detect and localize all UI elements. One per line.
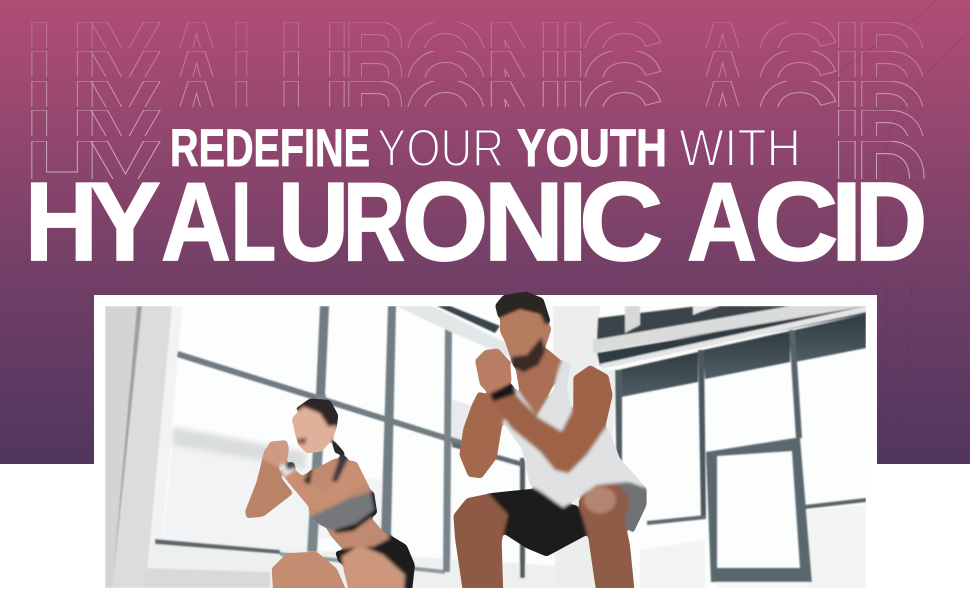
watch: [490, 383, 517, 402]
main title: R: [343, 160, 405, 284]
beard: [512, 337, 545, 372]
shorts: [336, 534, 415, 588]
woman: [245, 398, 415, 595]
main title: N: [484, 160, 564, 284]
dark window beams: [618, 352, 698, 397]
main title: [24, 160, 927, 284]
main title: C: [579, 160, 664, 284]
main title: C: [754, 160, 839, 284]
main title: H: [24, 160, 97, 284]
main title: A: [161, 160, 231, 284]
white ledge: [593, 306, 866, 353]
bra: [311, 492, 376, 532]
door frame: [706, 438, 812, 582]
tank top: [503, 360, 647, 508]
main title: I: [558, 160, 587, 284]
torso: [303, 458, 390, 548]
neck: [515, 348, 562, 417]
main title: U: [278, 160, 349, 284]
right windows horizontal bars: [647, 515, 706, 525]
hair: [293, 398, 347, 455]
man: [453, 292, 647, 595]
faint tree line art: [830, 0, 970, 246]
main title: L: [230, 160, 276, 284]
gym interior: [105, 306, 866, 588]
near arm: [492, 365, 613, 473]
subtitle: REDEFINE: [170, 120, 370, 178]
gradient banner background: [0, 0, 970, 464]
hair: [495, 292, 551, 325]
shorts: [488, 488, 590, 557]
subtitle: WITH: [679, 120, 801, 178]
face: [292, 407, 337, 453]
watch: [280, 462, 296, 477]
main title: Y: [88, 160, 160, 284]
sill and lower wall: [145, 540, 560, 588]
fist: [262, 440, 289, 467]
far arm: [245, 448, 293, 518]
ceiling block: [596, 306, 866, 340]
outside haze: [164, 447, 311, 550]
photo frame: [94, 295, 877, 600]
outlined repeated title rows: [31, 22, 925, 179]
right wall: [553, 306, 615, 588]
main title: D: [855, 160, 927, 284]
mullions: [698, 350, 706, 518]
photo: man and woman squatting in a gym: [105, 292, 866, 588]
left window frames: [176, 350, 462, 446]
near arm: [279, 466, 344, 509]
subtitle: YOUTH: [517, 120, 667, 178]
legs: [453, 493, 508, 595]
far arm: [459, 392, 503, 478]
main title: A: [687, 160, 757, 284]
subtitle: [170, 120, 801, 178]
subtitle: YOUR: [377, 120, 504, 178]
fists: [475, 348, 512, 395]
face: [500, 310, 552, 370]
main title: I: [831, 160, 862, 284]
main title: O: [402, 160, 488, 284]
concrete columns: [105, 306, 137, 588]
thighs: [272, 552, 348, 588]
